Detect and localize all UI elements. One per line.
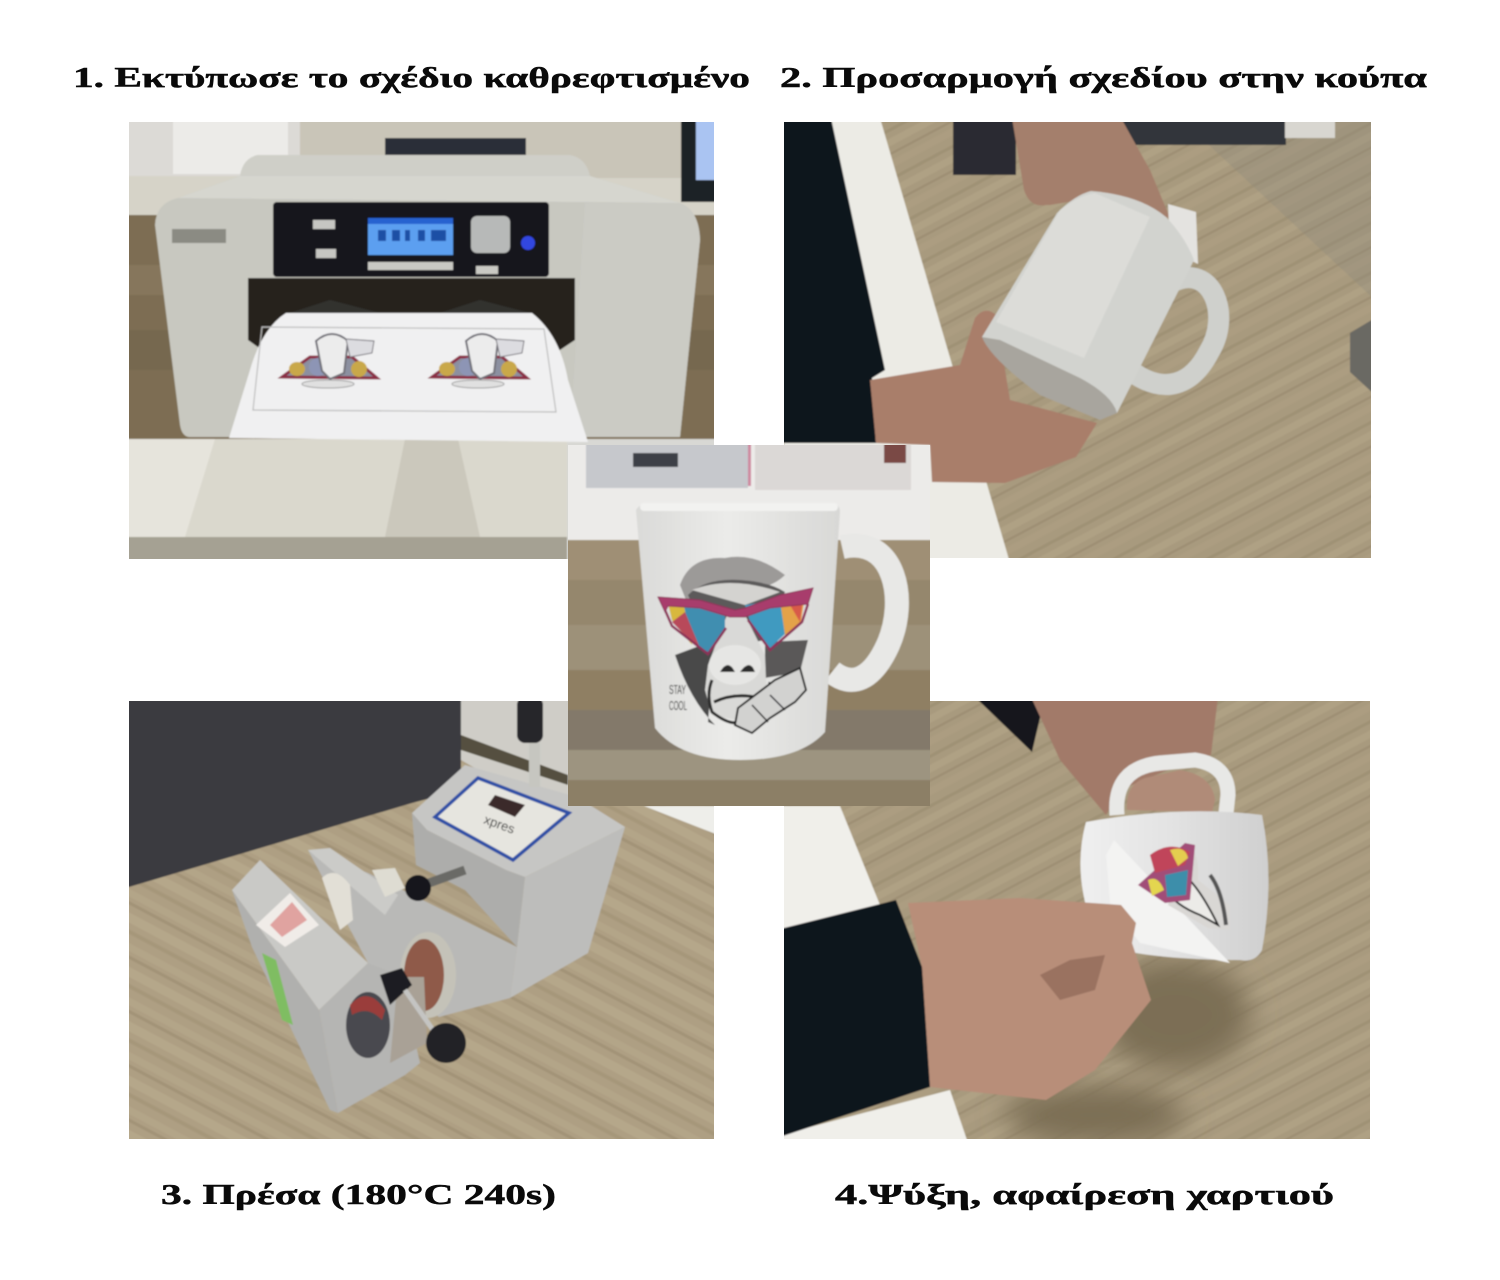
press base: [308, 850, 517, 1017]
title: step 3: 3. Πρέσα (180°C 240s): [161, 1179, 556, 1211]
sleeve: [780, 118, 885, 443]
photo: mug press: xpres: [482, 812, 517, 837]
title: step 2: 2. Προσαρμογή σχεδίου στην κούπα: [780, 62, 1427, 94]
wall and cabinet: [460, 701, 568, 795]
clamp knob: [426, 1023, 466, 1063]
mug handle: [1132, 278, 1219, 384]
printed paper: [229, 313, 588, 442]
bore hole: [346, 992, 390, 1058]
warning sticker: [256, 893, 319, 947]
photo: applying design to mug: [780, 118, 1375, 563]
title: step 4: 4.Ψύξη, αφαίρεση χαρτιού: [835, 1179, 1334, 1211]
stay cool text: STAY: [669, 682, 686, 697]
white table strip: [784, 118, 1010, 563]
photo: printer: [125, 118, 720, 563]
bracket: [390, 977, 427, 1063]
green label: [262, 953, 293, 1025]
hand: [735, 668, 806, 733]
mug body: [1080, 811, 1268, 961]
left lens: [668, 603, 725, 652]
clamp: [308, 848, 398, 915]
photo: finished mug: COOL: [669, 698, 687, 713]
printer body: [154, 198, 585, 438]
control panel: [273, 202, 549, 277]
photo: mug press: [125, 697, 718, 1143]
heater bore: [400, 932, 456, 1018]
press back unit: [412, 813, 525, 947]
control panel and display: [435, 778, 569, 860]
mug handle: [1117, 760, 1228, 815]
counter below printer: [125, 439, 567, 537]
mug body: [982, 191, 1194, 413]
peeled paper: [1106, 840, 1230, 963]
lower hand: [908, 898, 1151, 1100]
lower sleeve: [780, 900, 930, 1137]
paper slot: [248, 278, 575, 350]
photo: cooling and peeling paper: [780, 697, 1374, 1145]
paper under mug: [1168, 204, 1198, 264]
front block: [232, 890, 338, 1113]
lower hand: [870, 311, 1097, 483]
print design right: [432, 334, 527, 388]
transferred design: [1168, 856, 1204, 922]
mug handle: [832, 546, 897, 680]
muzzle and chin: [705, 615, 768, 722]
sensor and tube: [517, 697, 543, 743]
glasses frame: [658, 588, 813, 617]
gorilla design: [658, 557, 813, 733]
mug body: [636, 503, 840, 760]
upper hand: [1031, 697, 1218, 815]
fingers through handle: [1127, 770, 1215, 812]
white table pieces: [780, 806, 880, 935]
knob and shaft: [418, 870, 465, 887]
photo: finished mug: [564, 441, 934, 811]
upper sleeve: [978, 701, 1041, 752]
print design left: [282, 334, 377, 388]
wood table: [564, 540, 934, 580]
right lens: [745, 596, 805, 648]
title: step 1: 1. Εκτύπωσε το σχέδιο καθρεφτισμένο: [73, 62, 750, 94]
upper hand: [1012, 118, 1170, 218]
